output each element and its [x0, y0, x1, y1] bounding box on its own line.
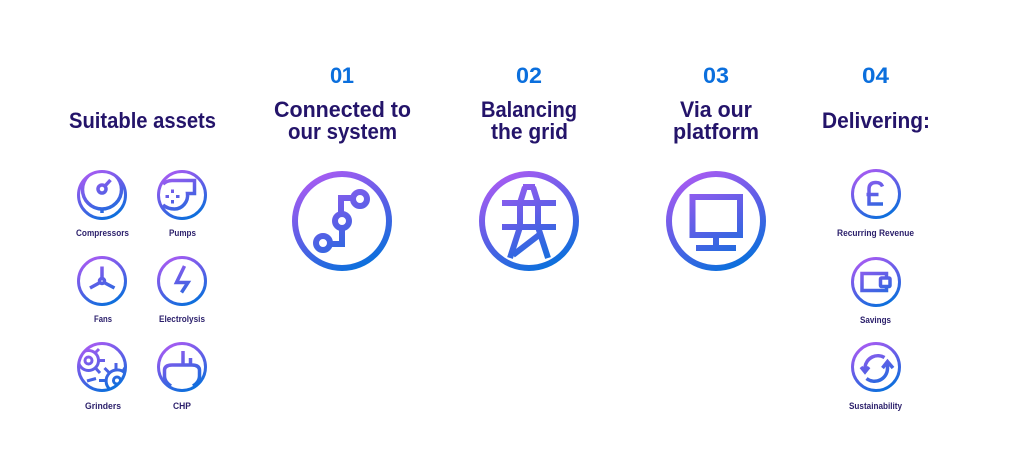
heading: connected to our system: our system [288, 119, 397, 144]
number: 02: 02 [516, 63, 542, 88]
panel: step 02 balancing the grid [481, 63, 577, 268]
panel: step 04 delivering [822, 63, 930, 411]
label: sustainability: Sustainability [849, 401, 902, 411]
label: electrolysis: Electrolysis [159, 314, 205, 324]
icon: pylon [482, 174, 576, 268]
heading: connected to our system: Connected to [274, 97, 411, 122]
asset: grinders [78, 344, 126, 411]
icon: lightning bolt [158, 258, 206, 304]
icon: pump [158, 172, 206, 218]
icon: grinder gears [78, 344, 126, 392]
asset: chp [158, 344, 206, 411]
heading: balancing the grid: the grid [491, 119, 568, 144]
icon: compressor [78, 170, 126, 218]
label: savings: Savings [860, 315, 891, 325]
icon: monitor [669, 174, 763, 268]
number: 01: 01 [330, 63, 354, 88]
panel: step 03 via our platform [669, 63, 763, 268]
icon: fan [78, 258, 126, 304]
icon: pound sign [852, 170, 900, 218]
heading: delivering: Delivering: [822, 108, 930, 133]
heading: via our platform: platform [673, 119, 759, 144]
icon: connected nodes [295, 174, 389, 268]
asset: pumps [158, 172, 206, 238]
number: 04: 04 [862, 63, 890, 88]
benefit: recurring revenue [837, 170, 914, 238]
panel: suitable assets [69, 108, 216, 411]
number: 03: 03 [703, 63, 729, 88]
label: grinders: Grinders [85, 401, 121, 411]
heading: via our platform [673, 97, 759, 144]
icon: recycle arrows [852, 344, 900, 390]
heading: balancing the grid [481, 97, 577, 144]
label: fans: Fans [94, 314, 112, 324]
label: recurring revenue: Recurring Revenue [837, 228, 914, 238]
label: pumps: Pumps [169, 228, 196, 238]
panel: step 01 connected to our system [274, 63, 411, 268]
asset: compressors [76, 170, 129, 238]
heading: via our platform: Via our [680, 97, 752, 122]
heading: connected to our system [274, 97, 411, 144]
icon: chp unit [158, 344, 206, 390]
label: chp: CHP [173, 401, 191, 411]
benefit: savings [852, 258, 900, 325]
asset: fans [78, 258, 126, 324]
benefit: sustainability [849, 344, 902, 411]
heading: balancing the grid: Balancing [481, 97, 577, 122]
asset: electrolysis [158, 258, 206, 324]
label: compressors: Compressors [76, 228, 129, 238]
icon: wallet [852, 258, 900, 306]
heading: suitable assets: Suitable assets [69, 108, 216, 133]
